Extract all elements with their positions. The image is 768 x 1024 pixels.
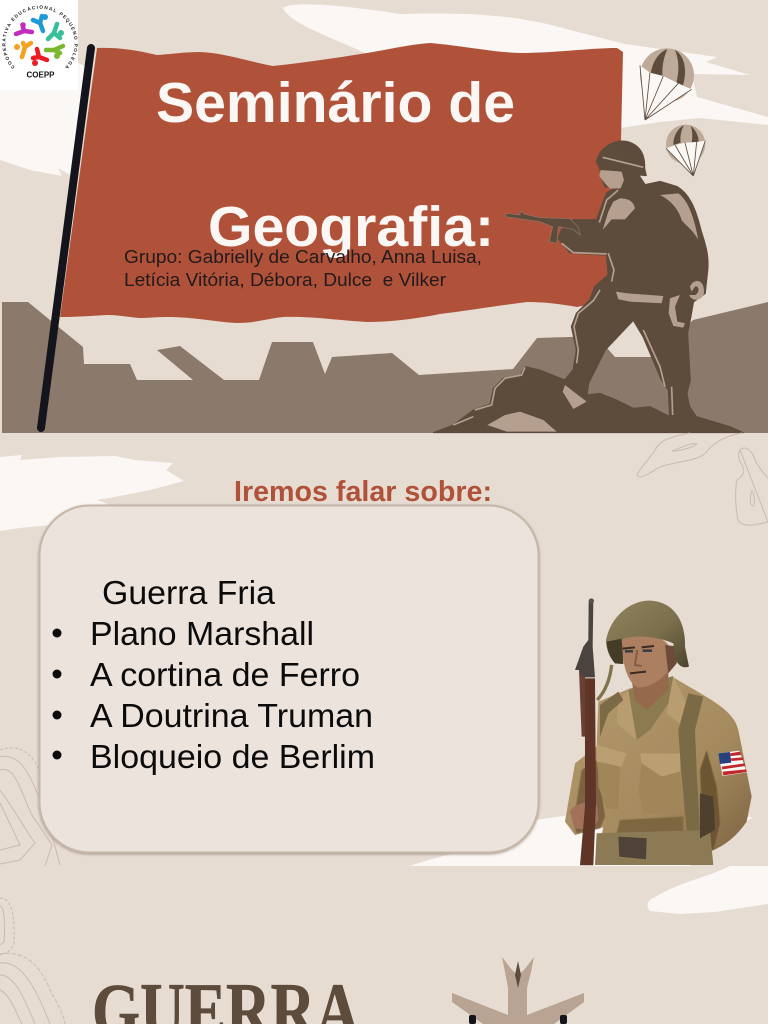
belt and trousers xyxy=(595,830,713,865)
pockets xyxy=(597,745,680,777)
jacket xyxy=(565,677,752,865)
logo xyxy=(0,0,78,90)
rock xyxy=(433,367,743,433)
topic list: Guerra Fria xyxy=(102,575,275,612)
ground silhouette xyxy=(2,302,768,433)
logo label: COEPP xyxy=(26,70,55,80)
group names: Letícia Vitória, Débora, Dulce e Vilker xyxy=(124,270,446,290)
contour lines slide 2 right xyxy=(637,433,768,525)
red flag xyxy=(60,43,623,323)
shirt and collar xyxy=(628,676,673,740)
topic list: A Doutrina Truman xyxy=(90,698,373,735)
topic list: Bloqueio de Berlim xyxy=(90,739,375,776)
logo figures xyxy=(14,14,64,66)
jacket shading xyxy=(573,750,720,850)
parachute large xyxy=(640,48,694,120)
title xyxy=(156,71,515,259)
helmet xyxy=(606,601,689,667)
neck xyxy=(632,668,668,710)
group names xyxy=(124,247,482,290)
soldier details xyxy=(487,170,704,432)
flag patch xyxy=(718,751,747,776)
contour lines slide 2 left xyxy=(0,748,60,866)
hand xyxy=(570,803,598,831)
rifle xyxy=(580,678,596,865)
contour lines slide 3 left xyxy=(0,898,65,1024)
topic list: Plano Marshall xyxy=(90,616,314,653)
title: Seminário de xyxy=(156,71,515,135)
face xyxy=(622,636,669,688)
bullets xyxy=(52,628,62,760)
strap xyxy=(597,665,612,700)
rifle xyxy=(506,211,580,243)
soldier silhouette with rifle on rock xyxy=(433,141,743,433)
heading: iremos falar sobre: Iremos falar sobre: xyxy=(234,476,492,508)
flag pole xyxy=(41,48,91,428)
title: Geografia: xyxy=(208,195,494,259)
topic list: A cortina de Ferro xyxy=(90,657,360,694)
topic list xyxy=(90,575,375,776)
slide 2 clouds xyxy=(0,455,753,866)
slide 1 clouds xyxy=(0,4,768,176)
body xyxy=(558,141,708,420)
icon: airplane xyxy=(452,957,584,1024)
slide 3 cloud xyxy=(648,866,768,914)
parachute small xyxy=(666,125,705,176)
topics panel xyxy=(40,506,538,852)
soldier portrait xyxy=(565,598,752,865)
group names: Grupo: Gabrielly de Carvalho, Anna Luisa, xyxy=(124,247,482,267)
